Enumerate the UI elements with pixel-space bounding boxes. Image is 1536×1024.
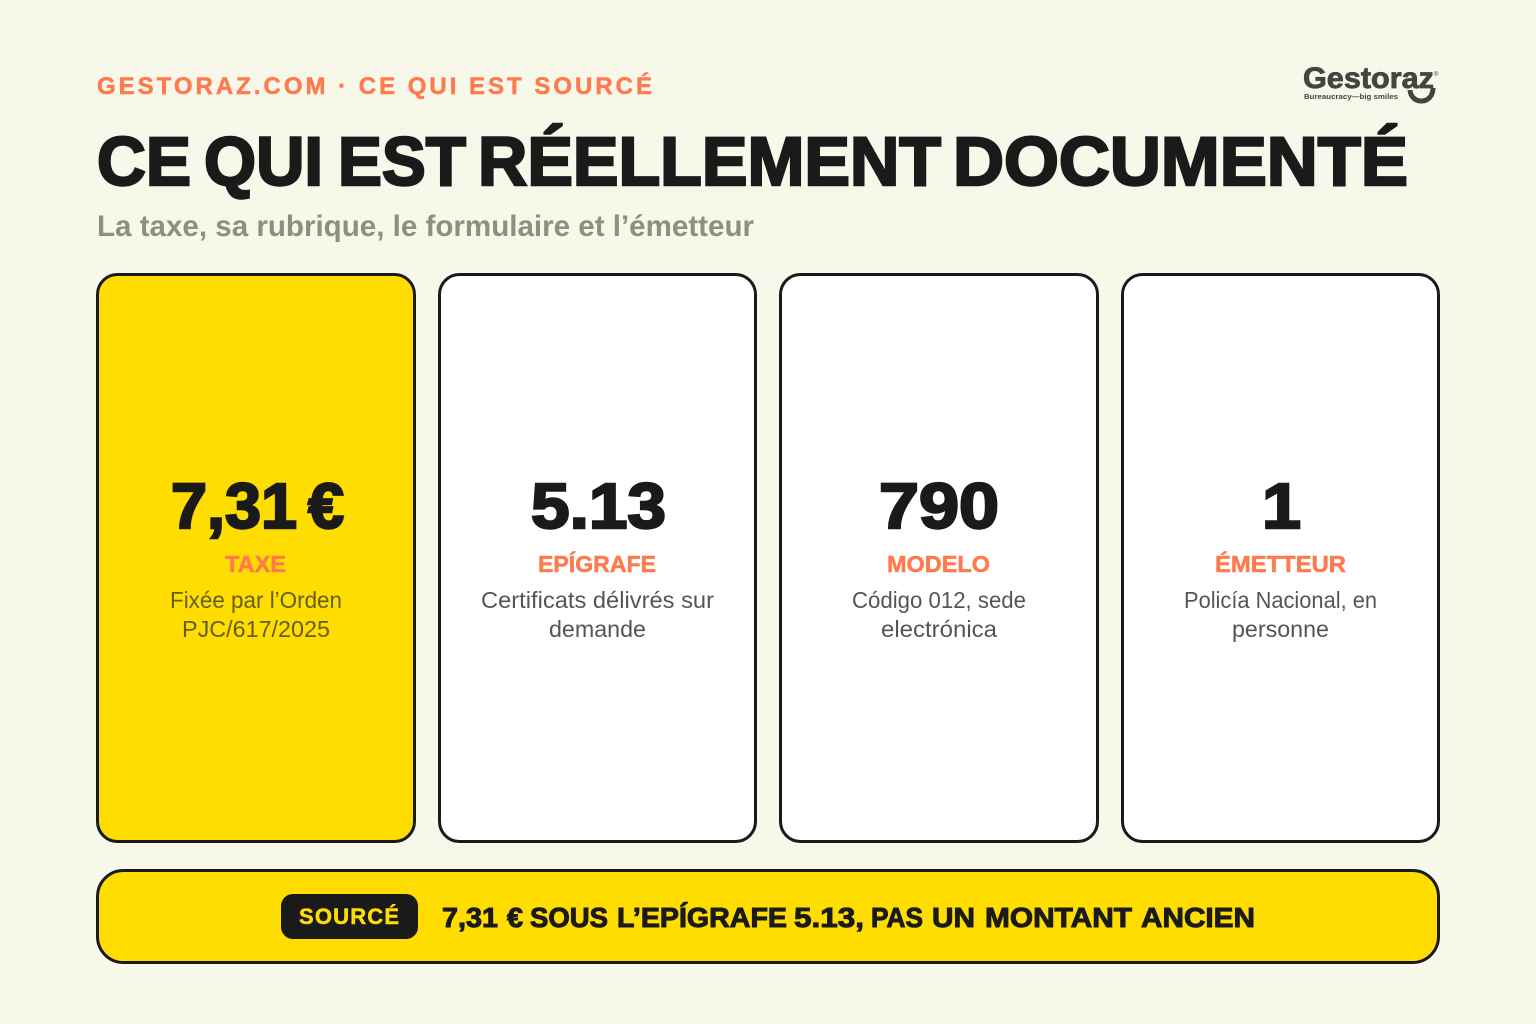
description: epígrafe: Certificats délivrés sur	[481, 587, 714, 613]
callout text: €	[507, 902, 523, 933]
callout text: L’EPÍGRAFE	[617, 902, 787, 933]
callout text: UN	[932, 902, 975, 933]
description: taxe: PJC/617/2025	[182, 616, 330, 642]
description: émetteur: personne	[1232, 616, 1329, 642]
description: epígrafe	[481, 587, 714, 642]
callout text: SOUS	[530, 902, 608, 933]
title	[97, 123, 1408, 200]
badge: sourcé	[281, 894, 418, 939]
label: émetteur: ÉMETTEUR	[1215, 550, 1346, 577]
panel: modelo	[780, 274, 1098, 842]
panel: epígrafe	[440, 274, 756, 842]
description: taxe: Fixée par l’Orden	[170, 587, 342, 613]
title: QUI	[204, 123, 323, 200]
eyebrow: GESTORAZ.COM · CE QUI EST SOURCÉ	[97, 72, 652, 100]
description: modelo	[852, 587, 1026, 642]
description: modelo: electrónica	[881, 616, 997, 642]
badge: sourcé: SOURCÉ	[299, 904, 399, 929]
callout text: 7,31	[442, 902, 498, 933]
label: epígrafe: EPÍGRAFE	[538, 550, 656, 577]
stat: 7,31 €: €	[308, 470, 344, 542]
label: modelo: MODELO	[887, 551, 990, 577]
callout banner	[98, 870, 1438, 962]
stat: 5.13: 5.13	[531, 470, 666, 542]
title: RÉELLEMENT	[478, 123, 941, 200]
title: DOCUMENTÉ	[953, 123, 1408, 200]
label: taxe: TAXE	[225, 551, 286, 577]
description: émetteur: Policía Nacional, en	[1184, 587, 1377, 613]
description: taxe	[170, 587, 342, 642]
logo: Gestoraz: ®	[1434, 71, 1439, 78]
description: modelo: Código 012, sede	[852, 587, 1026, 613]
panel: taxe	[98, 274, 414, 842]
logo: Gestoraz: Bureaucracy—big smiles	[1304, 92, 1398, 101]
callout text: PAS	[871, 902, 923, 933]
stat: 790: 790	[879, 470, 999, 542]
stat: 1: 1	[1262, 470, 1301, 542]
panel: émetteur	[1122, 274, 1438, 842]
callout text	[442, 902, 1255, 933]
description: epígrafe: demande	[549, 616, 646, 642]
callout text: MONTANT	[985, 902, 1132, 933]
description: émetteur	[1184, 587, 1377, 642]
logo: Gestoraz: Gestoraz	[1303, 62, 1434, 95]
callout text: ANCIEN	[1141, 902, 1255, 933]
stat: 7,31 €: 7,31	[171, 470, 297, 542]
title: EST	[338, 123, 466, 200]
title: CE	[97, 123, 191, 200]
subtitle: La taxe, sa rubrique, le formulaire et l’émetteur	[97, 210, 754, 243]
callout text: 5.13,	[794, 902, 864, 933]
